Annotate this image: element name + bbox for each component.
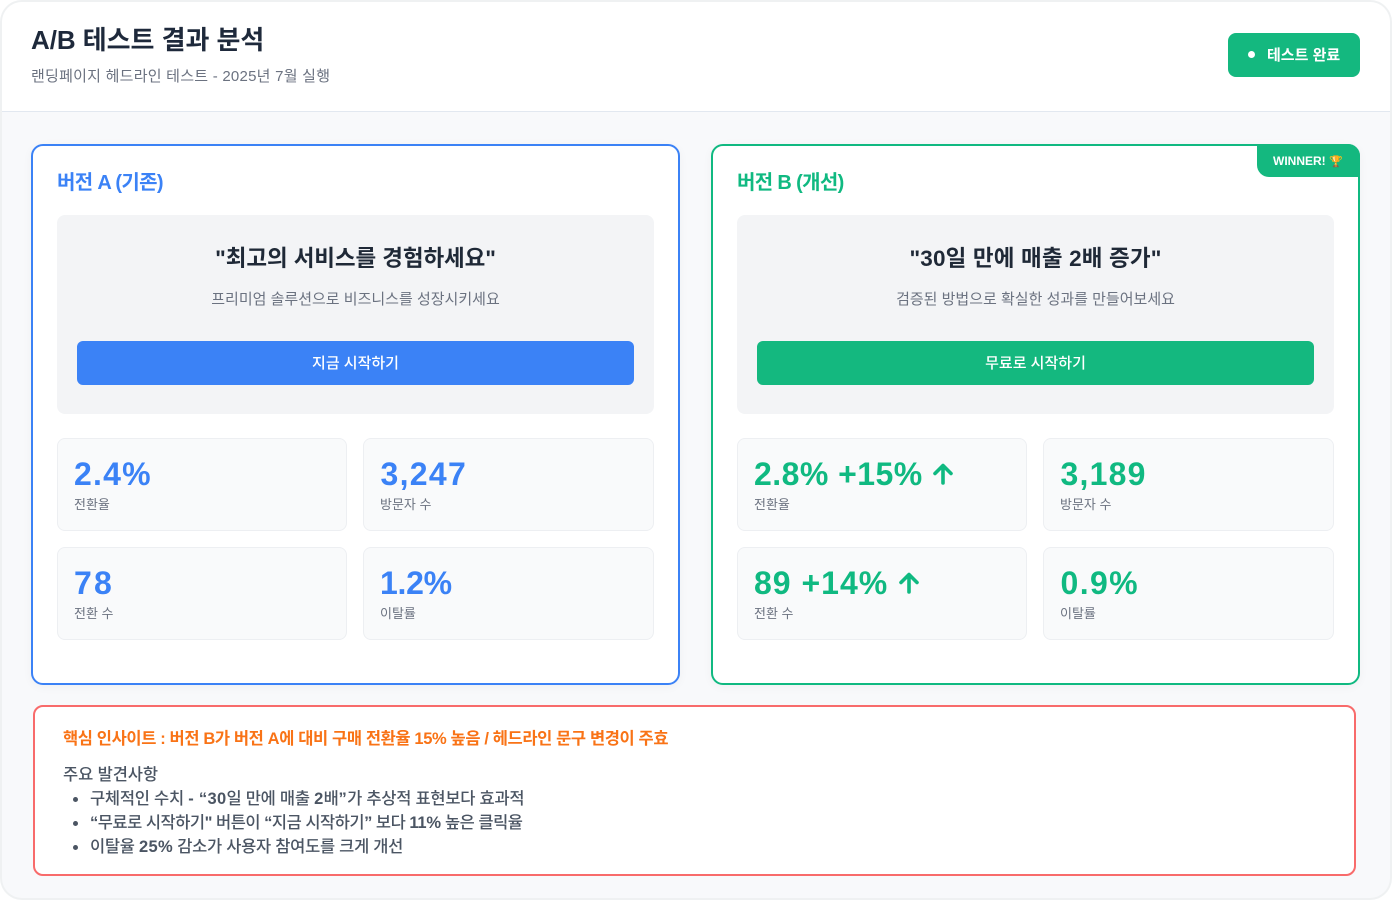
panel: key insight	[33, 705, 1356, 876]
winner ribbon	[1257, 144, 1360, 177]
finding 2: “무료로 시작하기" 버튼이 “지금 시작하기” 보다 11% 높은 클릭율	[90, 814, 522, 832]
stat: bounce rate A	[363, 546, 654, 640]
stat: conversion rate B	[737, 438, 1027, 531]
description B: 검증된 방법으로 확실한 성과를 만들어보세요	[896, 291, 1175, 308]
ribbon label: WINNER! 🏆	[1273, 154, 1343, 168]
value: 2.4%	[74, 456, 152, 492]
stat: visitors B	[1043, 438, 1334, 531]
label: 이탈률	[1060, 606, 1096, 620]
findings heading: 주요 발견사항	[63, 766, 158, 784]
label: 방문자 수	[1060, 497, 1111, 512]
stat: conversion rate A	[57, 438, 347, 531]
status badge	[1228, 33, 1360, 77]
label: 전환 수	[754, 606, 794, 620]
badge label: 테스트 완료	[1267, 47, 1340, 64]
description A: 프리미엄 솔루션으로 비즈니스를 성장시키세요	[211, 291, 500, 308]
icon: status dot	[1248, 51, 1255, 58]
value: 3,247	[380, 456, 467, 492]
stat: conversions A	[57, 546, 347, 640]
stat: visitors A	[363, 438, 654, 531]
button B	[757, 341, 1314, 385]
landing page preview B	[737, 215, 1334, 414]
label: 이탈률	[380, 606, 416, 620]
value: 0.9%	[1060, 564, 1139, 600]
finding 3: 이탈율 25% 감소가 사용자 참여도를 크게 개선	[90, 838, 403, 856]
headline B: "30일 만에 매출 2배 증가"	[909, 246, 1162, 271]
subtitle: 랜딩페이지 헤드라인 테스트 - 2025년 7월 실행	[31, 68, 330, 85]
label: 전환 수	[74, 606, 114, 620]
insight headline: 핵심 인사이트 : 버전 B가 버전 A에 대비 구매 전환율 15% 높음 / 헤드라인 문구 변경이 주효	[63, 730, 668, 748]
value: 3,189	[1060, 456, 1147, 492]
label: 전환율	[74, 497, 110, 512]
label: 전환율	[754, 497, 790, 512]
value: 89 +14%	[754, 564, 888, 600]
icon: up arrow	[899, 572, 919, 594]
header bar	[2, 2, 1390, 112]
stat: conversions B	[737, 546, 1027, 640]
button A: 지금 시작하기	[312, 355, 399, 372]
version A heading: 버전 A (기존)	[57, 172, 163, 194]
button B: 무료로 시작하기	[985, 355, 1086, 372]
panel: version A	[31, 144, 680, 685]
value: 2.8% +15%	[754, 456, 923, 492]
title: A/B 테스트 결과 분석	[31, 25, 264, 55]
panel: version B	[711, 144, 1360, 685]
value: 1.2%	[380, 564, 452, 600]
label: 방문자 수	[380, 497, 431, 512]
landing page preview A	[57, 215, 654, 414]
value: 78	[74, 564, 114, 600]
icon: up arrow	[933, 464, 953, 485]
headline A: "최고의 서비스를 경험하세요"	[215, 246, 496, 271]
button A	[77, 341, 634, 385]
stat: bounce rate B	[1043, 546, 1334, 640]
findings list	[73, 790, 524, 856]
finding 1: 구체적인 수치 - “30일 만에 매출 2배”가 추상적 표현보다 효과적	[90, 790, 524, 808]
version B heading: 버전 B (개선)	[737, 172, 844, 194]
